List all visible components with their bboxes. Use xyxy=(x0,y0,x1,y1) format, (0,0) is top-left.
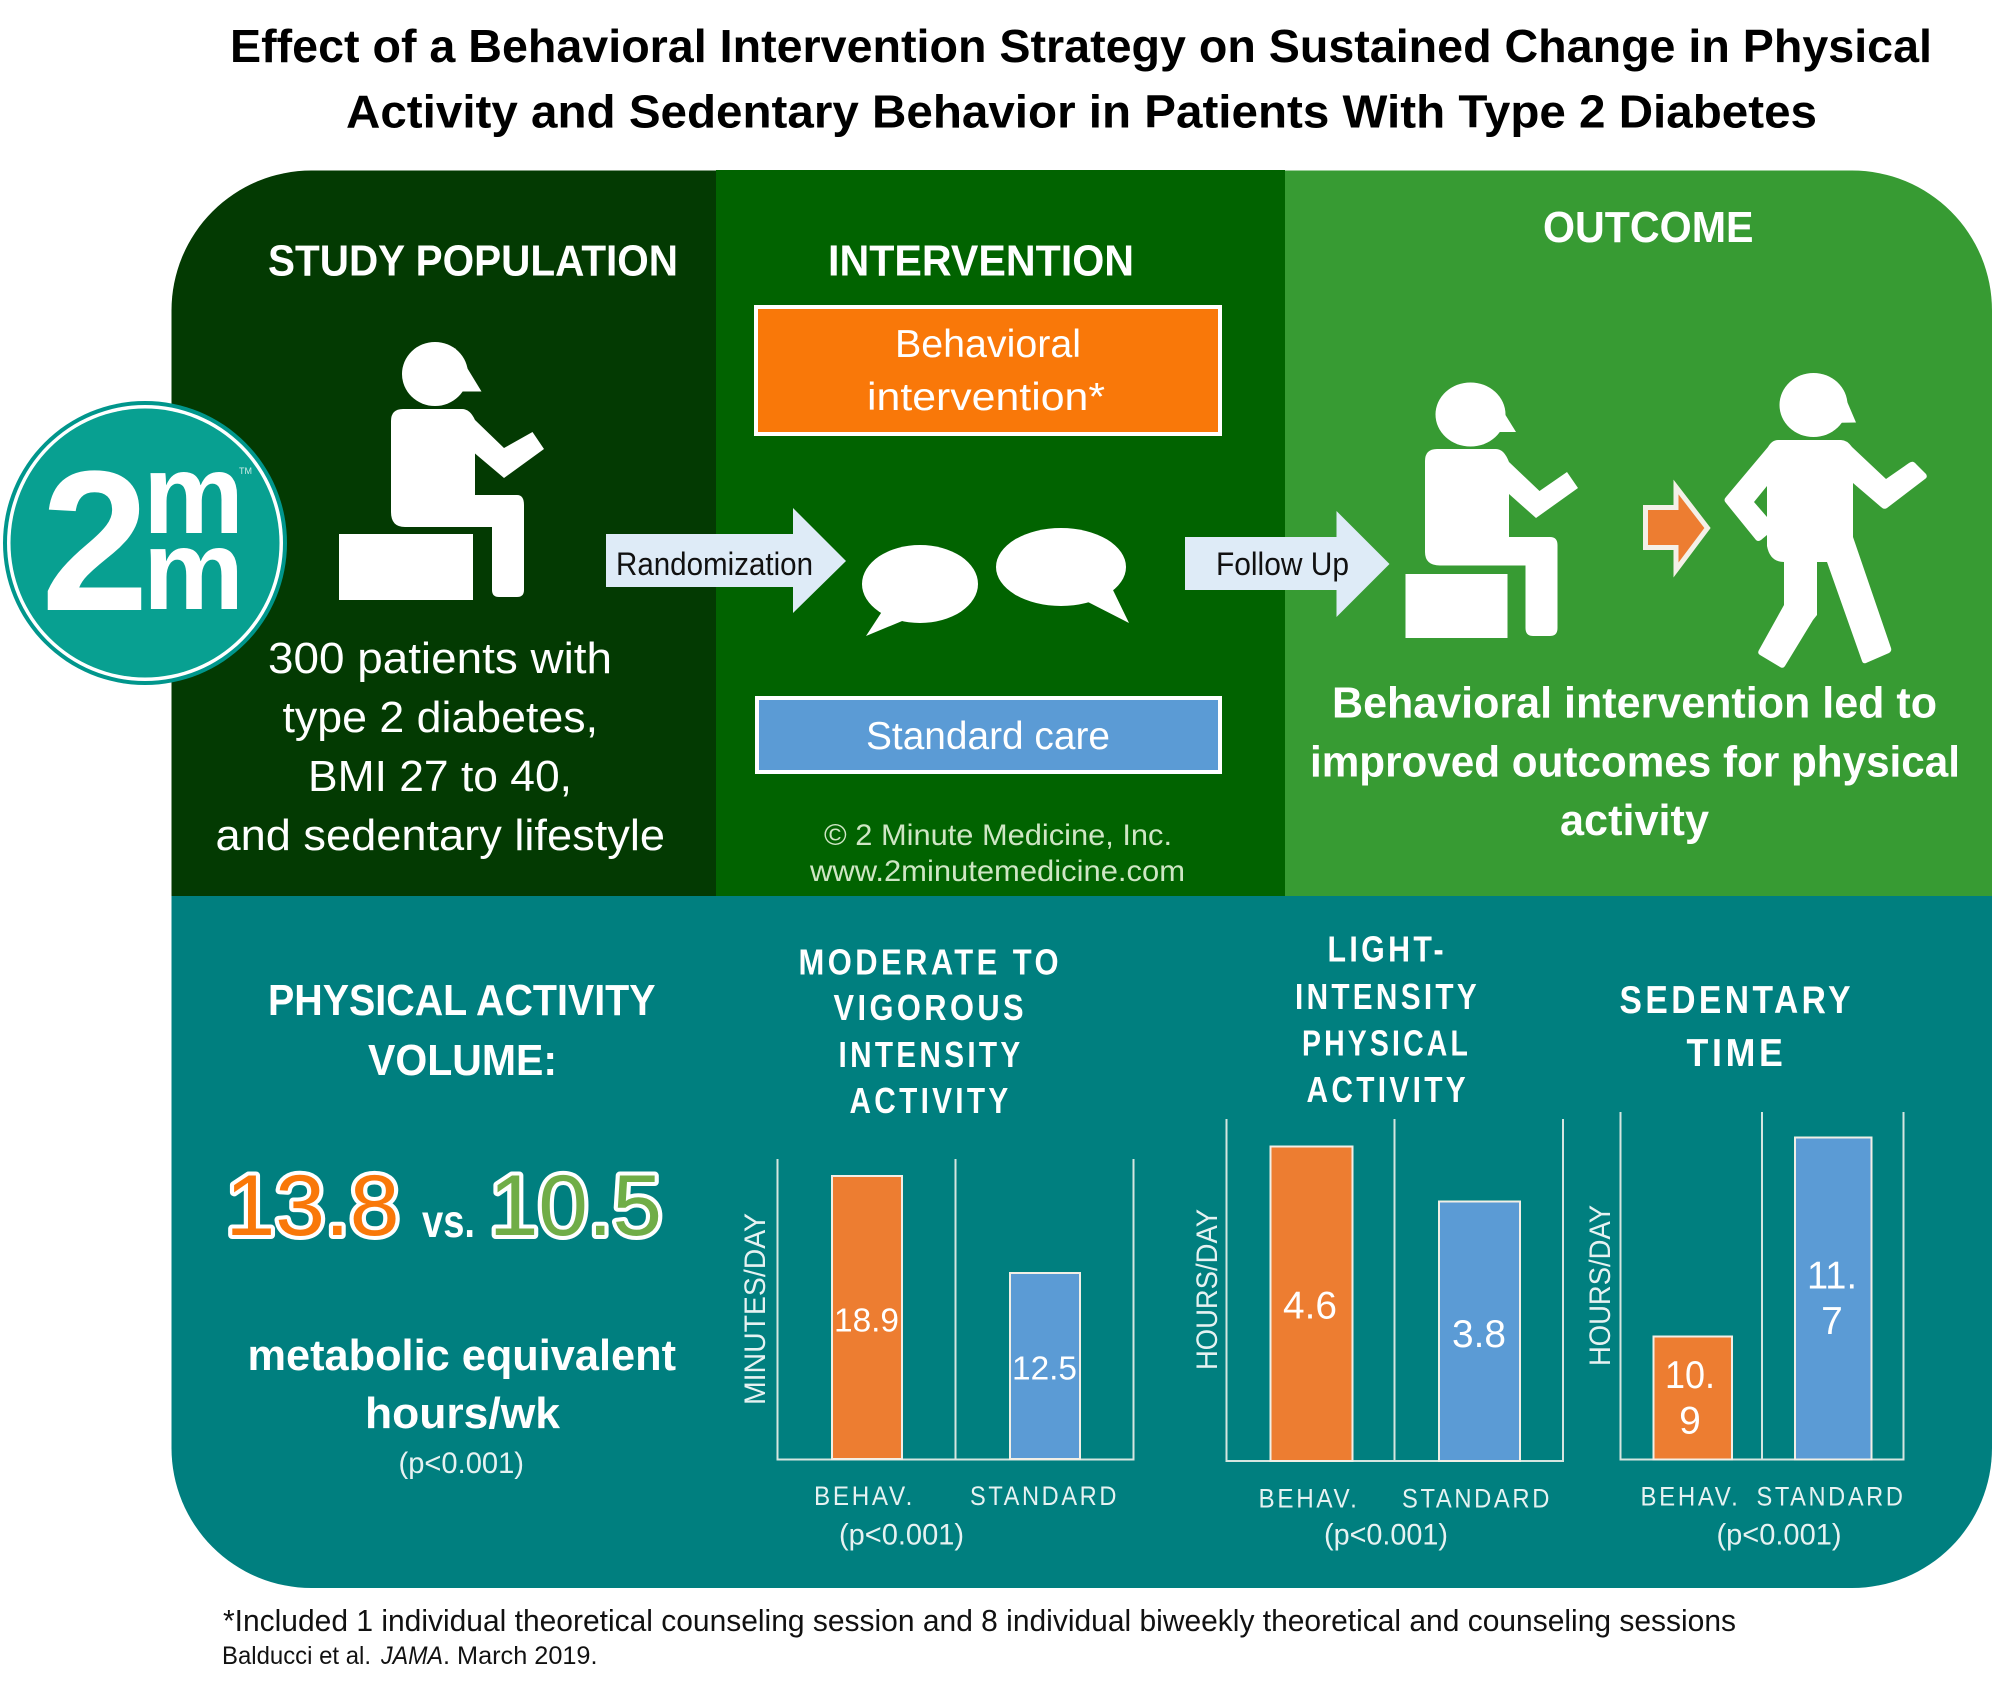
category labels: BEHAV. xyxy=(1258,1484,1360,1514)
arrow: follow up: Follow Up xyxy=(1216,546,1349,582)
chart title: ACTIVITY xyxy=(1306,1069,1469,1110)
citation xyxy=(222,1642,598,1670)
bar: behavioral: 18.9 xyxy=(834,1302,899,1338)
citation: Balducci et al. xyxy=(222,1642,371,1670)
title: Effect of a Behavioral Intervention Strategy on Sustained Change in Physical xyxy=(230,20,1932,72)
chart title xyxy=(1295,928,1480,1110)
icon: seated person after follow up xyxy=(1406,382,1578,638)
category labels: BEHAV. xyxy=(814,1481,915,1511)
chart: light-intensity physical activity xyxy=(1191,928,1563,1552)
copyright text: www.2minutemedicine.com xyxy=(809,855,1185,888)
axis label: HOURS/DAY xyxy=(1584,1205,1617,1366)
title: Activity and Sedentary Behavior in Patients With Type 2 Diabetes xyxy=(346,86,1817,138)
heading: outcome: OUTCOME xyxy=(1543,203,1754,252)
bar: behavioral: 10. xyxy=(1665,1354,1715,1397)
copyright text xyxy=(809,819,1185,888)
panel: study population xyxy=(172,170,716,897)
bar: standard: 12.5 xyxy=(1012,1350,1077,1386)
box: behavioral intervention: intervention* xyxy=(867,376,1105,419)
heading: study population: STUDY POPULATION xyxy=(268,236,678,286)
arrow: follow up xyxy=(1185,511,1390,617)
category labels: BEHAV. xyxy=(1640,1482,1740,1512)
chart title: PHYSICAL xyxy=(1302,1022,1471,1064)
logo: 2 Minute Medicine xyxy=(3,401,287,685)
icon: walking person xyxy=(1724,373,1927,668)
chart title: VIGOROUS xyxy=(834,987,1027,1028)
text: study population description: type 2 diabetes, xyxy=(282,693,598,742)
block: physical activity volume: VOLUME: xyxy=(368,1036,557,1085)
icon: seated person xyxy=(339,342,544,600)
chart title: ACTIVITY xyxy=(850,1080,1012,1121)
box: standard care: Standard care xyxy=(866,715,1110,758)
category labels: STANDARD xyxy=(1756,1482,1906,1512)
bar: standard xyxy=(1439,1202,1520,1461)
stat: vs: vs. xyxy=(422,1195,475,1247)
heading: intervention: INTERVENTION xyxy=(828,236,1134,286)
block: physical activity volume: PHYSICAL ACTIVITY xyxy=(268,976,656,1025)
bar: standard xyxy=(1010,1273,1080,1459)
chart title: LIGHT- xyxy=(1328,928,1447,970)
text: study population description: 300 patients with xyxy=(268,634,612,683)
category labels xyxy=(1640,1482,1906,1552)
logo: 2 Minute Medicine: 2 xyxy=(41,430,149,653)
block: physical activity volume: (p<0.001) xyxy=(398,1447,524,1480)
text: study population description: and sedentary lifestyle xyxy=(216,811,665,860)
citation: . March 2019. xyxy=(443,1642,598,1670)
text: outcome statement: activity xyxy=(1560,796,1710,845)
block: physical activity volume xyxy=(226,976,676,1480)
panel: outcome xyxy=(1285,170,1992,897)
bar: behavioral xyxy=(1654,1336,1732,1460)
copyright text: © 2 Minute Medicine, Inc. xyxy=(824,819,1172,852)
box: standard care xyxy=(757,698,1220,772)
footnote: *Included 1 individual theoretical counseling session and 8 individual biweekly theoretical and counseling sessions xyxy=(223,1603,1736,1638)
bar: standard: 3.8 xyxy=(1452,1313,1506,1356)
block: physical activity volume: hours/wk xyxy=(365,1389,561,1438)
title xyxy=(230,20,1932,138)
panel: intervention xyxy=(716,170,1285,897)
citation: JAMA xyxy=(380,1642,443,1670)
category labels: STANDARD xyxy=(970,1481,1119,1511)
bar: behavioral: 9 xyxy=(1679,1400,1701,1442)
axis label: HOURS/DAY xyxy=(1191,1209,1224,1370)
text: outcome statement: Behavioral intervention led to xyxy=(1332,678,1937,728)
text: outcome statement xyxy=(1310,678,1960,845)
category labels: STANDARD xyxy=(1402,1484,1552,1514)
box: behavioral intervention: Behavioral xyxy=(895,323,1081,366)
category labels: (p<0.001) xyxy=(839,1518,964,1552)
text: study population description xyxy=(216,634,665,860)
box: behavioral intervention xyxy=(756,307,1220,434)
bar: standard: 11. xyxy=(1807,1254,1857,1298)
chart title: INTENSITY xyxy=(1295,976,1480,1017)
footnote xyxy=(222,1603,1736,1670)
bar: standard: 7 xyxy=(1821,1300,1843,1343)
bar: behavioral xyxy=(1270,1146,1352,1461)
category labels xyxy=(1258,1484,1552,1552)
chart: sedentary time xyxy=(1584,979,1906,1552)
category labels xyxy=(814,1481,1119,1552)
bar: behavioral: 4.6 xyxy=(1283,1284,1337,1328)
bar: behavioral xyxy=(832,1176,902,1459)
text: study population description: BMI 27 to 40, xyxy=(308,752,572,801)
chart title: SEDENTARY xyxy=(1620,979,1854,1022)
block: physical activity volume: metabolic equivalent xyxy=(248,1331,676,1380)
category labels: (p<0.001) xyxy=(1716,1518,1842,1552)
chart title: MODERATE TO xyxy=(798,942,1062,982)
text: outcome statement: improved outcomes for physical xyxy=(1310,738,1960,786)
chart title: TIME xyxy=(1686,1032,1786,1075)
stat: standard value: 10.5 xyxy=(489,1158,662,1254)
chart title: INTENSITY xyxy=(838,1034,1024,1075)
chart title xyxy=(1620,979,1854,1075)
arrow: seated to walking xyxy=(1646,487,1708,570)
logo: 2 Minute Medicine: TM xyxy=(239,466,252,476)
arrow: randomization xyxy=(606,508,846,613)
panel: results xyxy=(172,896,1992,1588)
icon: speech bubbles xyxy=(862,528,1129,636)
axis label: MINUTES/DAY xyxy=(739,1213,772,1405)
chart: moderate to vigorous intensity activity xyxy=(739,942,1134,1552)
category labels: (p<0.001) xyxy=(1324,1518,1448,1552)
logo: 2 Minute Medicine: m xyxy=(143,431,244,557)
stat: behavioral value: 13.8 xyxy=(226,1158,400,1254)
chart title xyxy=(798,942,1062,1121)
logo: 2 Minute Medicine: m xyxy=(143,507,244,633)
arrow: randomization: Randomization xyxy=(616,546,813,582)
bar: standard xyxy=(1795,1138,1872,1460)
